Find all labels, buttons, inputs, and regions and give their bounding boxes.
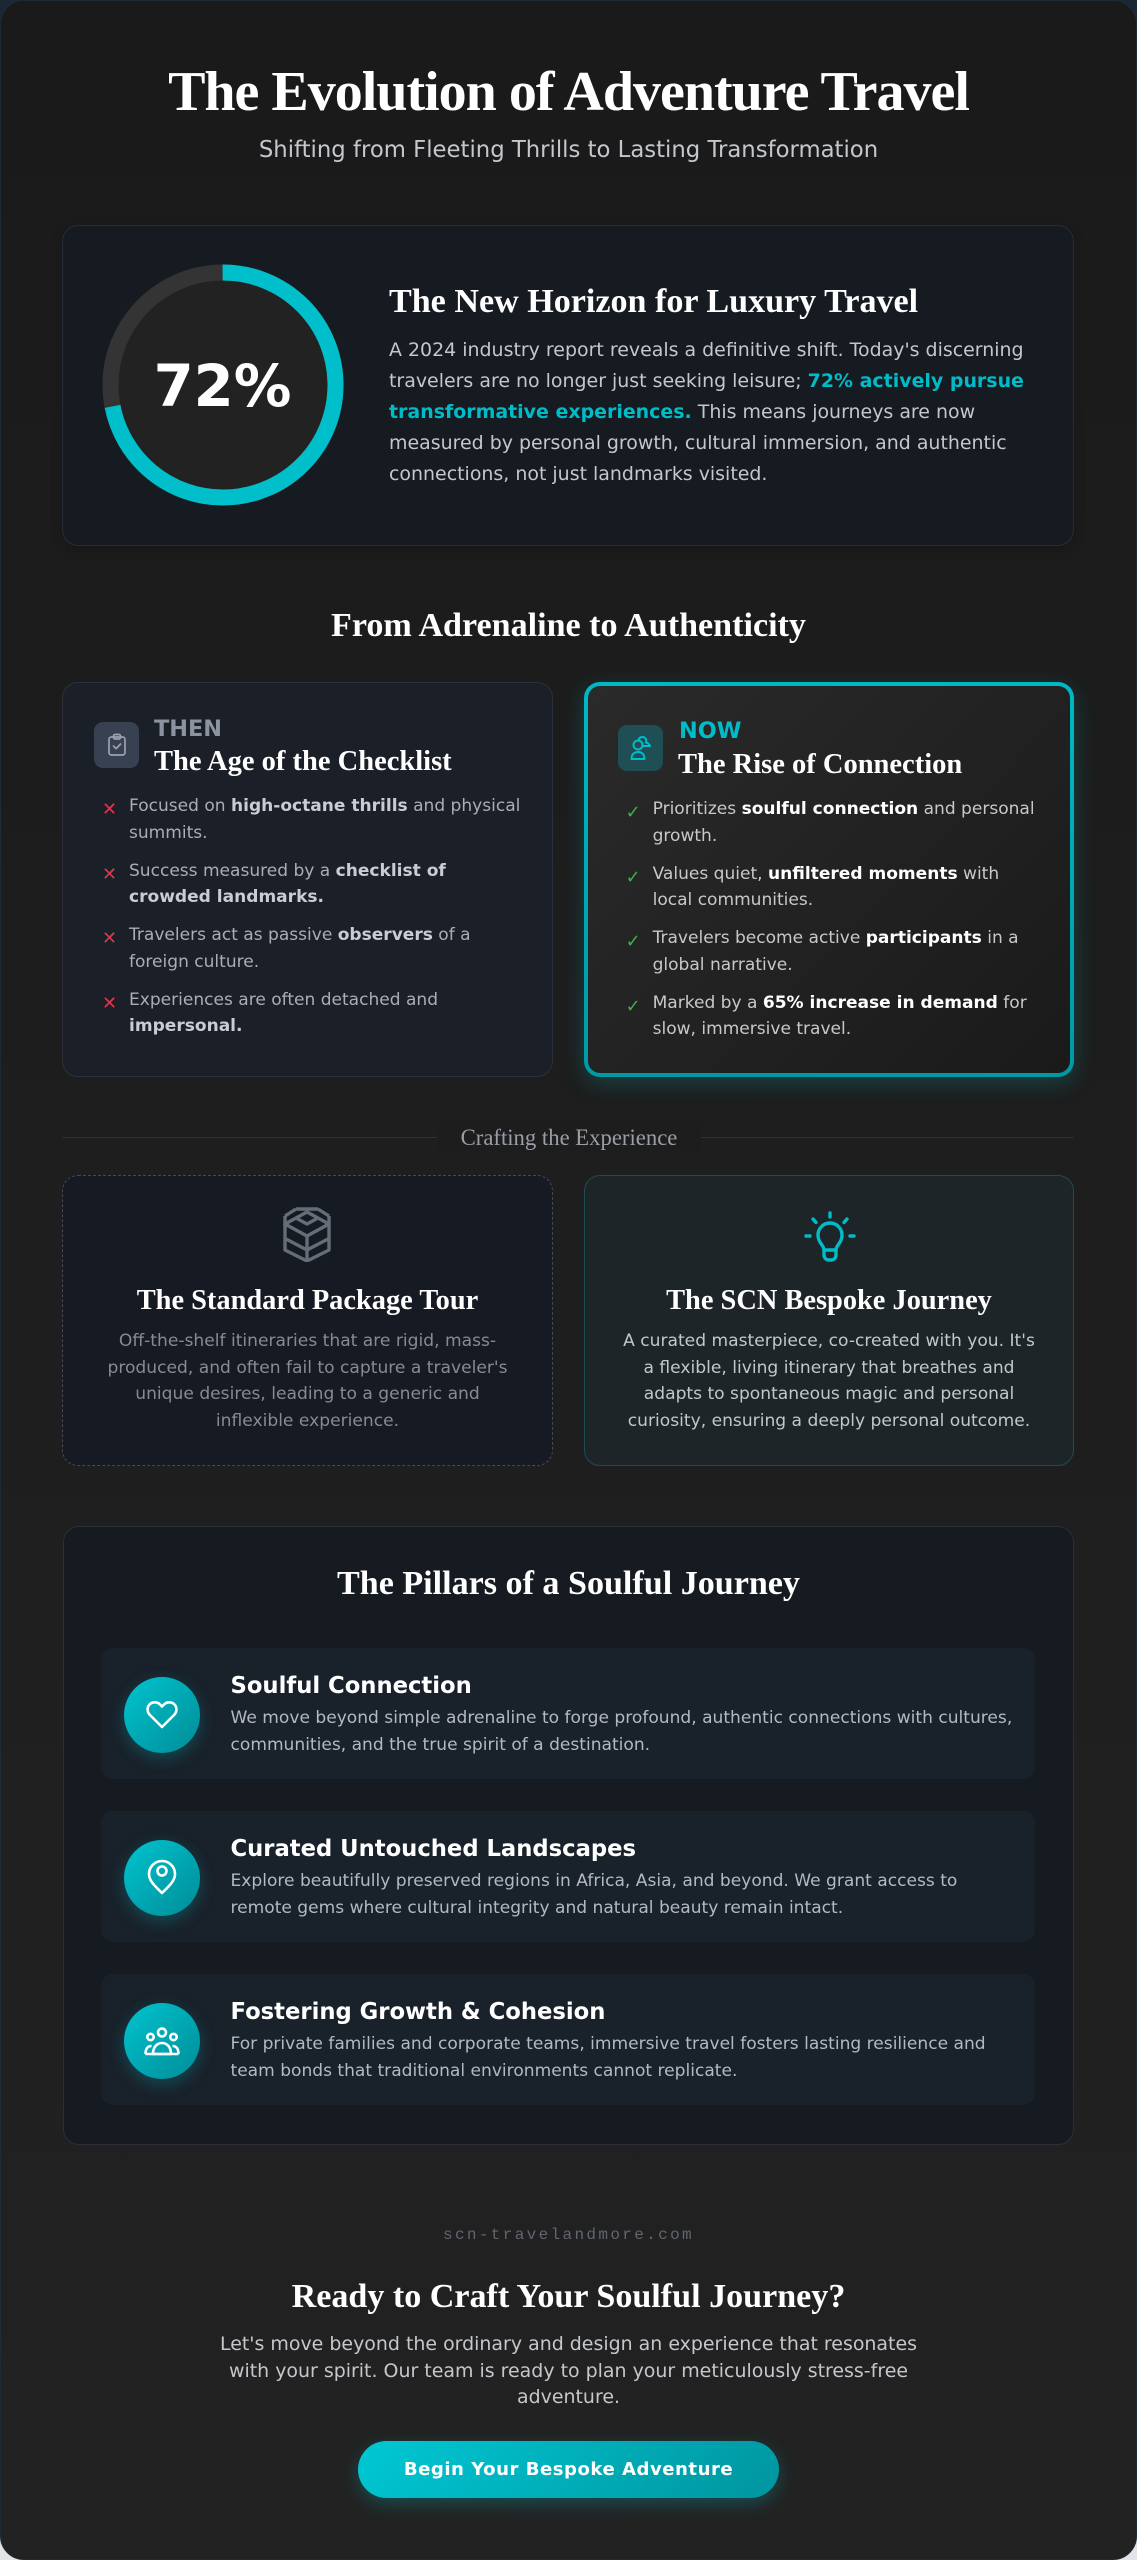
heading: scn bespoke journey: The SCN Bespoke Journey	[666, 1284, 992, 1316]
list: then characteristics: foreign culture.	[129, 952, 259, 972]
pillar title: Soulful Connection	[230, 1672, 472, 1698]
panel: then: ✕	[102, 799, 117, 820]
list: then characteristics: Focused on high-octane thrills and physical	[129, 796, 520, 816]
chart: 72% progress ring: 72%	[154, 353, 291, 420]
pillar: soulful connection	[101, 1648, 1035, 1779]
website url: scn-travelandmore.com	[443, 2226, 694, 2244]
list: then characteristics: crowded landmarks.	[129, 887, 324, 907]
panel: then: ✕	[102, 864, 117, 885]
text: bespoke description	[623, 1331, 1035, 1431]
pillar: fostering growth and cohesion	[101, 1974, 1035, 2105]
pillar: curated untouched landscapes	[101, 1811, 1035, 1942]
heading: rise of connection: The Rise of Connection	[678, 749, 962, 780]
pillar text: communities, and the true spirit of a destination.	[230, 1735, 650, 1755]
panel body text: measured by personal growth, cultural immersion, and authentic	[389, 432, 1007, 454]
call to action text: with your spirit. Our team is ready to plan your meticulously stress-free	[229, 2360, 908, 2382]
text: bespoke description: adapts to spontaneous magic and personal	[644, 1384, 1014, 1404]
divider: crafting the experience: Crafting the Experience	[461, 1125, 677, 1150]
list: then characteristics: Experiences are often detached and	[129, 990, 438, 1010]
text: standard tour description: inflexible experience.	[216, 1411, 399, 1431]
pillar text: Explore beautifully preserved regions in Africa, Asia, and beyond. We grant access to	[230, 1871, 957, 1891]
list: now characteristics: global narrative.	[653, 955, 793, 975]
text: bespoke description: A curated masterpiece, co-created with you. It's	[623, 1331, 1035, 1351]
icon: clipboard	[94, 722, 139, 768]
panel: then: ✕	[102, 928, 117, 949]
title: The Evolution of Adventure Travel	[168, 60, 969, 122]
text: standard tour description: Off-the-shelf itineraries that are rigid, mass-	[119, 1331, 496, 1351]
panel body text	[389, 339, 1024, 485]
tag: now: NOW	[679, 718, 741, 744]
icon: light bulb	[804, 1211, 856, 1262]
panel: now	[584, 682, 1074, 1077]
tag: then: THEN	[154, 716, 222, 742]
icon: group of people	[124, 2003, 200, 2079]
text: standard tour description: produced, and often fail to capture a traveler's	[107, 1358, 508, 1378]
panel: then	[62, 682, 553, 1077]
panel: new horizon for luxury travel	[62, 225, 1074, 546]
list: then characteristics: Success measured by a checklist of	[129, 861, 446, 881]
list: now characteristics: Marked by a 65% increase in demand for	[653, 993, 1027, 1013]
panel body text: connections, not just landmarks visited.	[389, 463, 767, 485]
icon: map pin	[124, 1840, 200, 1916]
pillar text: remote gems where cultural integrity and natural beauty remain intact.	[230, 1898, 843, 1918]
chart: 72% progress ring	[102, 264, 344, 506]
list: then characteristics: impersonal.	[129, 1016, 242, 1036]
pillar text	[230, 1708, 1012, 1755]
panel: pillars of a soulful journey	[63, 1526, 1074, 2145]
call to action text: adventure.	[517, 2386, 620, 2408]
text: standard tour description: unique desires, leading to a generic and	[135, 1384, 480, 1404]
list: now characteristics: Values quiet, unfiltered moments with	[653, 864, 999, 884]
panel: now: ✓	[626, 802, 641, 823]
panel body text: travelers are no longer just seeking leisure; 72% actively pursue	[389, 370, 1024, 392]
heading: age of the checklist: The Age of the Checklist	[154, 746, 452, 777]
list: then characteristics: summits.	[129, 823, 208, 843]
list: now characteristics: Prioritizes soulful connection and personal	[653, 799, 1035, 819]
call to action text: Let's move beyond the ordinary and design an experience that resonates	[220, 2333, 917, 2355]
panel: then: ✕	[102, 993, 117, 1014]
panel: now: ✓	[626, 996, 641, 1017]
panel heading: The New Horizon for Luxury Travel	[389, 283, 918, 320]
list: now characteristics: slow, immersive travel.	[653, 1019, 851, 1039]
panel: now: ✓	[626, 867, 641, 888]
icon: package	[283, 1207, 331, 1262]
pillar title: Fostering Growth & Cohesion	[230, 1998, 605, 2024]
icon: heart	[124, 1677, 200, 1753]
panel: standard package tour	[62, 1175, 553, 1466]
subtitle: Shifting from Fleeting Thrills to Lasting Transformation	[259, 136, 878, 162]
list: now characteristics: local communities.	[653, 890, 813, 910]
list: now characteristics: Travelers become active participants in a	[653, 928, 1019, 948]
pillar text	[230, 2034, 986, 2081]
pillar text: We move beyond simple adrenaline to forge profound, authentic connections with cultures,	[230, 1708, 1012, 1728]
button: begin your bespoke adventure	[358, 2441, 779, 2498]
heading: pillars: The Pillars of a Soulful Journey	[337, 1565, 800, 1602]
call to action heading: Ready to Craft Your Soulful Journey?	[292, 2278, 845, 2315]
icon: people	[618, 725, 662, 771]
panel body text: transformative experiences. This means journeys are now	[389, 401, 975, 423]
list: then characteristics: Travelers act as passive observers of a	[129, 925, 471, 945]
text: bespoke description: a flexible, living itinerary that breathes and	[643, 1358, 1015, 1378]
section heading: From Adrenaline to Authenticity	[331, 607, 806, 644]
list: now characteristics	[626, 799, 1035, 1039]
list: then characteristics	[102, 796, 520, 1036]
pillar title: Curated Untouched Landscapes	[230, 1836, 636, 1862]
pillar text: For private families and corporate teams, immersive travel fosters lasting resilience and	[230, 2034, 986, 2054]
panel: now: ✓	[626, 931, 641, 952]
text: bespoke description: curiosity, ensuring a deeply personal outcome.	[628, 1411, 1030, 1431]
heading: standard package tour: The Standard Package Tour	[137, 1284, 478, 1316]
list: now characteristics: growth.	[653, 826, 717, 846]
button: begin your bespoke adventure: Begin Your Bespoke Adventure	[404, 2459, 733, 2480]
text: standard tour description	[107, 1331, 508, 1431]
panel body text: A 2024 industry report reveals a definitive shift. Today's discerning	[389, 339, 1024, 361]
pillar text	[230, 1871, 957, 1918]
panel: scn bespoke journey	[584, 1175, 1074, 1466]
pillar text: team bonds that traditional environments cannot replicate.	[230, 2061, 737, 2081]
call to action text	[220, 2333, 917, 2408]
